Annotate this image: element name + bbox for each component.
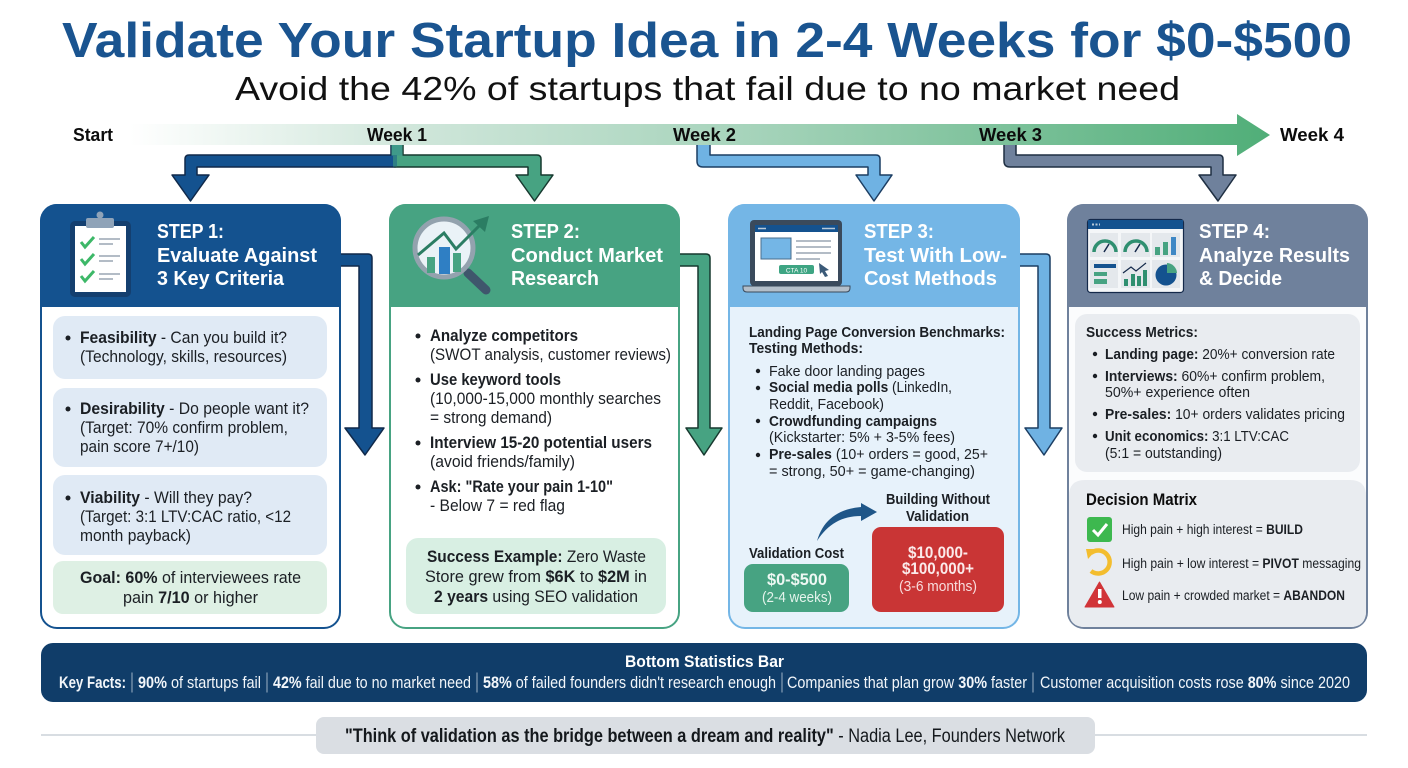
step 1 header bbox=[40, 204, 341, 307]
step 4 header bbox=[1067, 204, 1368, 307]
key facts line: 58% of failed founders didn't research enough bbox=[483, 674, 776, 692]
arrow: curved cost comparison bbox=[817, 503, 877, 541]
title: Validate Your Startup Idea in 2-4 Weeks for $0-$500 bbox=[62, 14, 1352, 68]
step 3 heading: STEP 3: bbox=[864, 220, 934, 243]
subtitle: Avoid the 42% of startups that fail due to no market need bbox=[235, 70, 1180, 107]
key facts line: 42% fail due to no market need bbox=[273, 674, 471, 692]
box: success example bbox=[406, 538, 666, 614]
step 3 heading: Test With Low- bbox=[864, 244, 1007, 267]
arrow: week 1 to steps 1 and 2 bbox=[172, 144, 553, 201]
box: success metrics: Pre-sales: 10+ orders validates pricing bbox=[1105, 407, 1345, 423]
statistics heading: Bottom Statistics Bar bbox=[625, 653, 785, 671]
list: research actions: Ask: "Rate your pain 1-10" bbox=[430, 478, 613, 496]
label: building without validation bbox=[886, 492, 990, 525]
step 4 heading: & Decide bbox=[1199, 267, 1282, 290]
box: success metrics: Interviews: 60%+ confirm problem, bbox=[1105, 369, 1325, 385]
list: research actions bbox=[416, 327, 671, 515]
box: success metrics: Success Metrics: bbox=[1086, 325, 1198, 341]
step 3 heading: Cost Methods bbox=[864, 267, 997, 290]
step 3 heading bbox=[864, 220, 1007, 290]
step 2 header bbox=[389, 204, 680, 307]
box: building cost: $10,000- bbox=[908, 544, 968, 562]
step 2 heading: STEP 2: bbox=[511, 220, 580, 243]
box: desirability: (Target: 70% confirm problem, bbox=[80, 419, 288, 437]
box: success metrics: (5:1 = outstanding) bbox=[1105, 446, 1222, 462]
box: success example: Success Example: Zero Waste bbox=[427, 548, 646, 566]
key facts line: | bbox=[266, 670, 268, 693]
label: building without validation: Building Without bbox=[886, 492, 990, 508]
label: validation cost: Validation Cost bbox=[749, 546, 844, 562]
box: decision matrix: Low pain + crowded market = ABANDON bbox=[1122, 588, 1345, 603]
step 2 heading bbox=[511, 220, 663, 290]
step 1 heading: 3 Key Criteria bbox=[157, 267, 285, 290]
list: research actions: - Below 7 = red flag bbox=[430, 497, 565, 515]
arrow: step 3 side bbox=[1018, 254, 1062, 455]
label: start: Start bbox=[73, 125, 113, 145]
text: testing methods: Fake door landing pages bbox=[769, 364, 925, 380]
text: testing methods: = strong, 50+ = game-changing) bbox=[769, 464, 975, 480]
box: decision matrix bbox=[1069, 480, 1366, 627]
quote: "Think of validation as the bridge between a dream and reality" - Nadia Lee, Founders Network bbox=[345, 726, 1065, 747]
key facts line: | bbox=[781, 670, 783, 693]
box: success example: Store grew from $6K to $2M in bbox=[425, 568, 647, 586]
box: desirability: Desirability - Do people want it? bbox=[80, 400, 309, 418]
icon: laptop landing page: CTA 10 bbox=[786, 268, 807, 274]
text: testing methods: Crowdfunding campaigns bbox=[769, 414, 937, 430]
box: desirability: pain score 7+/10) bbox=[80, 438, 199, 456]
step 1 heading: STEP 1: bbox=[157, 220, 224, 243]
key facts line bbox=[59, 670, 1350, 693]
box: building cost bbox=[872, 527, 1004, 612]
label: week 3: Week 3 bbox=[979, 125, 1042, 145]
panel: step 1 bbox=[40, 204, 341, 628]
step 1 heading: Evaluate Against bbox=[157, 244, 317, 267]
key facts line: | bbox=[476, 670, 478, 693]
box: decision matrix: High pain + high interest = BUILD bbox=[1122, 522, 1303, 537]
icon: laptop landing page bbox=[743, 220, 850, 292]
box: success metrics: Landing page: 20%+ conversion rate bbox=[1105, 347, 1335, 363]
label: week 2: Week 2 bbox=[673, 125, 736, 145]
label: week 1: Week 1 bbox=[367, 125, 427, 145]
box: validation cost bbox=[744, 564, 849, 612]
box: goal bbox=[53, 561, 327, 614]
key facts line: | bbox=[1032, 670, 1034, 693]
icon: pivot bbox=[1086, 549, 1110, 574]
text: testing methods: Testing Methods: bbox=[749, 341, 863, 357]
box: feasibility bbox=[53, 316, 327, 379]
text: testing methods: (Kickstarter: 5% + 3-5% fees) bbox=[769, 430, 955, 446]
step 2 heading: Research bbox=[511, 267, 599, 290]
key facts line: Customer acquisition costs rose 80% since 2020 bbox=[1040, 674, 1350, 692]
step 2 heading: Conduct Market bbox=[511, 244, 663, 267]
text: testing methods: Reddit, Facebook) bbox=[769, 397, 884, 413]
box: viability: (Target: 3:1 LTV:CAC ratio, <12 bbox=[80, 508, 291, 526]
box: success metrics: 50%+ experience often bbox=[1105, 385, 1250, 401]
box: building cost: (3-6 months) bbox=[899, 579, 977, 595]
box: decision matrix: Decision Matrix bbox=[1086, 490, 1197, 509]
box: validation cost: (2-4 weeks) bbox=[762, 590, 832, 606]
box: success example: 2 years using SEO validation bbox=[434, 588, 638, 606]
label: week 4: Week 4 bbox=[1280, 125, 1344, 145]
key facts line: Key Facts: bbox=[59, 674, 126, 692]
box: building cost: $100,000+ bbox=[902, 560, 974, 578]
list: research actions: = strong demand) bbox=[430, 409, 552, 427]
key facts line: | bbox=[131, 670, 133, 693]
list: research actions: (10,000-15,000 monthly searches bbox=[430, 390, 661, 408]
box: decision matrix: High pain + low interest = PIVOT messaging bbox=[1122, 556, 1361, 571]
arrow: step 2 side bbox=[678, 254, 722, 455]
box: validation cost: $0-$500 bbox=[767, 571, 827, 589]
list: research actions: (SWOT analysis, customer reviews) bbox=[430, 346, 671, 364]
box: feasibility: Feasibility - Can you build it? bbox=[80, 329, 287, 347]
icon: clipboard bbox=[70, 212, 131, 297]
key facts line: Companies that plan grow 30% faster bbox=[787, 674, 1027, 692]
label: building without validation: Validation bbox=[906, 509, 969, 525]
step 3 header bbox=[728, 204, 1020, 307]
panel: step 3 bbox=[728, 204, 1020, 628]
box: desirability bbox=[53, 388, 327, 467]
statistics bar bbox=[41, 643, 1367, 702]
list: research actions: (avoid friends/family) bbox=[430, 453, 575, 471]
text: testing methods: Landing Page Conversion Benchmarks: bbox=[749, 325, 1005, 341]
step 4 heading: STEP 4: bbox=[1199, 220, 1270, 243]
icon: warning bbox=[1085, 582, 1114, 607]
text: testing methods: Social media polls (LinkedIn, bbox=[769, 380, 952, 396]
text: testing methods bbox=[749, 325, 1005, 480]
icon: check bbox=[1087, 517, 1112, 542]
step 1 heading bbox=[157, 220, 317, 290]
step 4 heading bbox=[1199, 220, 1350, 290]
icon: magnifier chart bbox=[415, 216, 489, 290]
quote bbox=[41, 717, 1367, 754]
timeline arrow bbox=[73, 114, 1344, 156]
key facts line: 90% of startups fail bbox=[138, 674, 261, 692]
list: research actions: Analyze competitors bbox=[430, 327, 578, 345]
step 4 heading: Analyze Results bbox=[1199, 244, 1350, 267]
arrow: week 2 to step 3 bbox=[697, 144, 892, 201]
box: success metrics: Unit economics: 3:1 LTV:CAC bbox=[1105, 429, 1289, 445]
box: viability: month payback) bbox=[80, 527, 191, 545]
panel: step 2 bbox=[389, 204, 680, 628]
list: research actions: Use keyword tools bbox=[430, 371, 561, 389]
text: testing methods: Pre-sales (10+ orders = good, 25+ bbox=[769, 447, 988, 463]
arrow: week 3 to step 4 bbox=[1004, 144, 1236, 201]
box: goal: Goal: 60% of interviewees rate bbox=[80, 569, 301, 587]
box: success metrics bbox=[1075, 314, 1360, 472]
box: viability: Viability - Will they pay? bbox=[80, 489, 252, 507]
arrow: step 1 side bbox=[339, 254, 384, 455]
box: goal: pain 7/10 or higher bbox=[123, 589, 258, 607]
icon: analytics dashboard bbox=[1088, 220, 1184, 292]
panel: step 4 bbox=[1067, 204, 1368, 628]
list: research actions: Interview 15-20 potential users bbox=[430, 434, 652, 452]
box: viability bbox=[53, 475, 327, 555]
box: feasibility: (Technology, skills, resources) bbox=[80, 348, 287, 366]
